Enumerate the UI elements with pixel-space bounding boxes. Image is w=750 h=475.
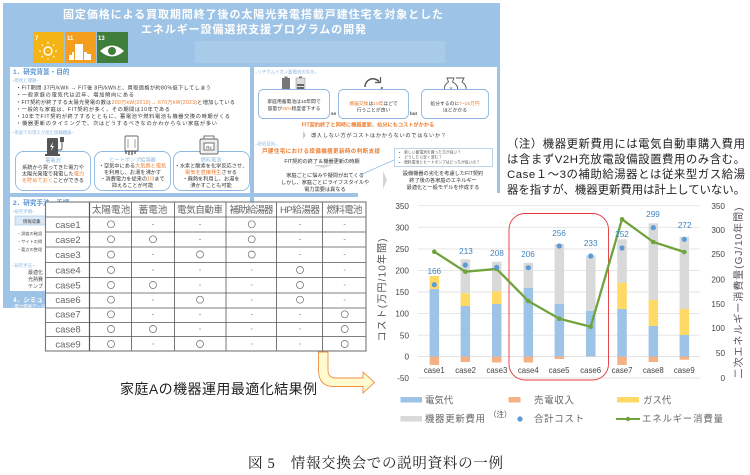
legend: 機器更新費用	[425, 413, 485, 424]
table row labels: case6	[55, 295, 81, 306]
total cost value labels: 299	[646, 210, 660, 219]
panel: research method: ・要点の整理	[17, 246, 43, 253]
box: replacement timing: 行うことが良い	[357, 106, 390, 114]
box: replacement timing	[338, 90, 408, 118]
total cost dots	[432, 225, 687, 287]
box: capacity loss	[258, 90, 330, 118]
table row labels: case3	[55, 250, 81, 261]
panel: research method: 2．研究手法・手順	[13, 198, 70, 207]
panel: research background and purpose: ・機器更新のタイミングで、次はどうするべきなのかわからない家庭が多い	[16, 119, 217, 127]
left axis labels: 50	[400, 332, 409, 340]
right column: battery degradation: 導入しない方がコストはかからないのではないか？	[311, 131, 446, 139]
box: storage battery: 系統から買ってきた電力や	[22, 163, 84, 171]
category labels: case3	[486, 366, 507, 375]
total cost value labels: 166	[427, 267, 442, 276]
box: storage battery: を貯めておくことができる	[22, 176, 84, 184]
table row labels: case1	[55, 220, 81, 231]
right axis labels: 250	[711, 250, 725, 259]
caption: optimization example for household A: 家庭Aの機器運用最適化結果例	[120, 381, 317, 397]
table row labels: case7	[55, 310, 81, 320]
panel: research method: 光熱費	[28, 276, 43, 283]
category labels: case9	[674, 366, 695, 375]
callout: household questions	[360, 148, 492, 175]
right axis title: 二次エネルギー消費量(GJ/10年間)	[732, 208, 745, 378]
SDG icons: 13	[98, 36, 105, 42]
right column: battery degradation: 最適化と一般モデルを作成する	[407, 183, 479, 191]
panel: research background and purpose	[10, 67, 497, 193]
SDG icons: 7	[35, 36, 39, 42]
total cost value labels	[427, 210, 692, 276]
box: heat pump water heater	[94, 152, 170, 190]
box: fuel cell: 電気を直接発生させる	[185, 168, 237, 176]
table row labels: case9	[55, 340, 81, 350]
category labels: case7	[612, 366, 632, 375]
right column: battery degradation: 終了後の各家庭のエネルギー	[409, 176, 477, 184]
right axis labels: 300	[711, 226, 725, 235]
right axis labels: 100	[711, 324, 725, 333]
panel: research background and purpose: ・一般家庭の電気代は近年、増加傾向にある	[16, 90, 134, 98]
legend: エネルギー消費量	[642, 413, 723, 424]
left axis labels: -50	[397, 374, 409, 383]
right column: battery degradation: FIT契約の終了＆機器更新の時期	[284, 157, 360, 165]
heading: simulation section: –電力需要データ	[12, 303, 45, 310]
box: disposal cost: ほどかかる	[443, 106, 467, 114]
left axis labels: 0	[404, 352, 409, 362]
right column: battery degradation: 家庭ごとに悩みや疑問が出てくる	[286, 171, 364, 179]
note: equipment cost explanation: （注）機器更新費用には電気自動車購入費用	[507, 136, 745, 150]
heading: simulation section	[12, 297, 45, 310]
total cost value labels: 272	[678, 221, 692, 230]
box: heat pump water heater: 抑えることが可能	[112, 181, 154, 189]
panel: research background and purpose: 1．研究背景・目的	[13, 67, 70, 76]
note: equipment cost explanation: 器を指すが、機器更新費用は計上していない。	[507, 182, 745, 196]
right column: battery degradation: 設備機器の劣化を考慮したFIT契約	[403, 169, 483, 177]
table: equipment combinations per case	[46, 202, 366, 351]
left axis title: コスト(万円/10年間)	[376, 238, 388, 342]
right column: battery degradation: 戸建住宅における設備機器更新時の判断支援	[262, 147, 380, 155]
SDG icons	[33, 32, 128, 63]
table row labels: case5	[55, 280, 81, 292]
total cost value labels: 213	[459, 247, 473, 256]
right column: battery degradation: –リチウムイオン蓄電池の劣化–	[255, 68, 318, 76]
icon: refresh arrows	[365, 77, 382, 97]
table header: 燃料電池	[326, 204, 363, 216]
box: fuel cell: ・廃熱を利用し、お湯を	[182, 174, 240, 182]
right axis labels: 150	[711, 300, 725, 309]
left axis labels: 250	[395, 245, 409, 254]
panel: research background and purpose: ・FIT契約が終了する太陽光発電の数は200万kW(2019)→ 670万kW(2023)と増加している	[16, 98, 235, 106]
category labels: case8	[643, 366, 664, 375]
box: capacity loss: 容量が35%程度低下する	[268, 105, 321, 112]
icon: money bags	[444, 78, 466, 94]
table header: 補助給湯器	[230, 204, 274, 216]
icon: fuel cell unit: Rx	[206, 145, 212, 150]
category labels: case2	[455, 366, 476, 375]
total cost value labels: 233	[584, 239, 598, 248]
right axis labels: 0	[720, 374, 725, 383]
legend: 電気代	[425, 394, 454, 406]
box: fuel cell	[174, 152, 250, 190]
legend: ガス代	[643, 394, 672, 406]
right column: battery degradation: 電力需要は異なる	[304, 185, 346, 193]
poster title	[63, 7, 443, 36]
poster title: エネルギー設備選択支援プログラムの開発	[141, 22, 366, 36]
table dash marks	[152, 224, 346, 344]
icon: charging station	[45, 137, 64, 156]
panel: research background and purpose: ・FIT期間 37円/kWh → FIT後 8円/kWhと、買取価格が約80%低下してしまう	[16, 84, 211, 92]
callout: household questions: • 新しい蓄電池を買った方が良い？	[399, 150, 461, 154]
SDG icons: 11	[67, 36, 74, 42]
legend: （注）	[489, 409, 512, 419]
panel: research method: 情報収集	[23, 218, 41, 225]
legend: 合計コスト	[534, 413, 584, 424]
box: storage battery	[16, 152, 90, 190]
left axis labels: 300	[395, 224, 409, 232]
left axis labels: 150	[395, 288, 409, 297]
table header: HP給湯器	[280, 204, 320, 216]
note: equipment cost explanation: Case１～3の補助給湯器とは従来型ガス給湯	[507, 167, 745, 181]
left axis labels: 350	[395, 202, 409, 211]
panel: research background and purpose: –現状と課題–	[12, 77, 39, 84]
heading: simulation section: 4．シミュ	[13, 297, 43, 304]
table header: 電気自動車	[177, 204, 223, 216]
table row labels: case8	[55, 324, 81, 336]
energy consumption line	[432, 217, 687, 329]
box: disposal cost	[422, 90, 488, 118]
table circle marks	[108, 221, 348, 348]
icon: batteries	[282, 76, 305, 96]
chart: cost and energy per case	[376, 202, 745, 424]
right axis labels	[711, 202, 725, 383]
icon: fuel cell unit	[200, 136, 218, 154]
box: disposal cost: 処分するのに7~15万円	[430, 100, 480, 107]
box: heat pump water heater: ヒートポンプ給湯器	[109, 156, 157, 164]
total cost value labels: 208	[490, 249, 504, 258]
panel: research method: –研究手法–	[12, 262, 35, 269]
icon: money bags: ¥	[450, 87, 453, 93]
panel: research method: –研究手順–	[12, 208, 35, 215]
table header: 蓄電池	[139, 204, 168, 216]
note: equipment cost explanation: は含まずV2H充放電設備設置費用のみ含む。	[507, 152, 745, 166]
table header: 太陽電池	[92, 204, 131, 216]
panel: research background and purpose: –家庭での導入が進む設備機器–	[12, 129, 75, 136]
arrow: table to chart	[318, 352, 374, 393]
panel: research method: ・調査の軸設	[17, 230, 43, 237]
box: heat pump water heater: を利用し、お湯を沸かす	[104, 168, 161, 176]
panel: research method: テンプ	[28, 284, 43, 290]
box: capacity loss: 家庭用蓄電池は10年間で	[267, 98, 321, 105]
box: heat pump water heater: ・空気中にある大気熱と電気	[99, 162, 166, 170]
category labels: case6	[580, 366, 601, 375]
box: fuel cell: ・水素と酸素を化学反応させ、	[175, 162, 247, 170]
category labels	[424, 366, 695, 375]
legend: 売電収入	[534, 394, 575, 406]
right axis labels: 200	[711, 276, 725, 284]
total cost value labels: 256	[552, 229, 566, 238]
table header	[92, 204, 363, 216]
figure caption: 図 5 情報交換会での説明資料の一例	[248, 454, 503, 472]
panel: research background and purpose: ・10年でFIT契約が終了するとともに、蓄電池や燃料電池も機器交換の時期がくる	[16, 112, 230, 120]
category labels: case4	[518, 366, 539, 375]
box: fuel cell: 沸かすことも可能	[190, 181, 233, 189]
right axis labels: 350	[711, 202, 725, 211]
red highlight: cases 4 to 6	[509, 214, 608, 380]
left axis labels	[395, 202, 409, 383]
box: storage battery: 蓄電池	[45, 156, 61, 164]
table row labels: case2	[55, 235, 81, 246]
category labels: case1	[424, 366, 445, 375]
category labels: case5	[549, 366, 570, 375]
panel: research method: ・サイトの掲	[17, 238, 42, 245]
left axis labels: 100	[395, 310, 409, 318]
right column: battery degradation: so	[331, 111, 337, 116]
right column: battery degradation: but	[410, 111, 417, 116]
panel: research background and purpose: ・一般的な家庭は、FIT契約が多く、その期間は10年である	[16, 105, 170, 113]
poster: research overview slide	[3, 3, 500, 310]
callout: household questions: • どうしたら安く済む？	[399, 154, 442, 160]
panel: research method: 最適化	[28, 269, 43, 276]
box: fuel cell: 燃料電池	[201, 156, 221, 164]
poster title: 固定価格による買取期間終了後の太陽光発電搭載戸建住宅を対象とした	[63, 7, 443, 21]
table row labels: case4	[55, 266, 81, 276]
left axis labels: 200	[395, 266, 409, 276]
total cost value labels: 206	[521, 250, 535, 259]
callout: household questions: • 燃料電池とヒートポンプはどっちが良いの？	[399, 160, 480, 164]
right column: battery degradation: しかし、家庭ごとにライフスタイルや	[281, 178, 369, 186]
legend	[400, 394, 723, 424]
box: heat pump water heater: ・消費電力を従来の1/3まで	[100, 174, 165, 182]
right column: battery degradation: FIT契約終了と同時に機器更新、処分にもコストがかかる	[302, 120, 434, 128]
box: replacement timing: 機器交換は10年ほどで	[349, 100, 398, 107]
box: storage battery: 太陽光発電で発電した電力	[22, 170, 84, 178]
total cost value labels: 252	[615, 230, 629, 239]
right column: battery degradation	[253, 68, 492, 193]
table row labels	[55, 220, 81, 350]
right axis labels: 50	[716, 349, 725, 358]
note: equipment cost explanation	[507, 136, 745, 196]
stacked bars	[430, 223, 689, 365]
panel: research method	[10, 197, 358, 291]
right column: battery degradation: –研究目的–	[255, 140, 278, 148]
icon: water heater	[125, 136, 138, 155]
